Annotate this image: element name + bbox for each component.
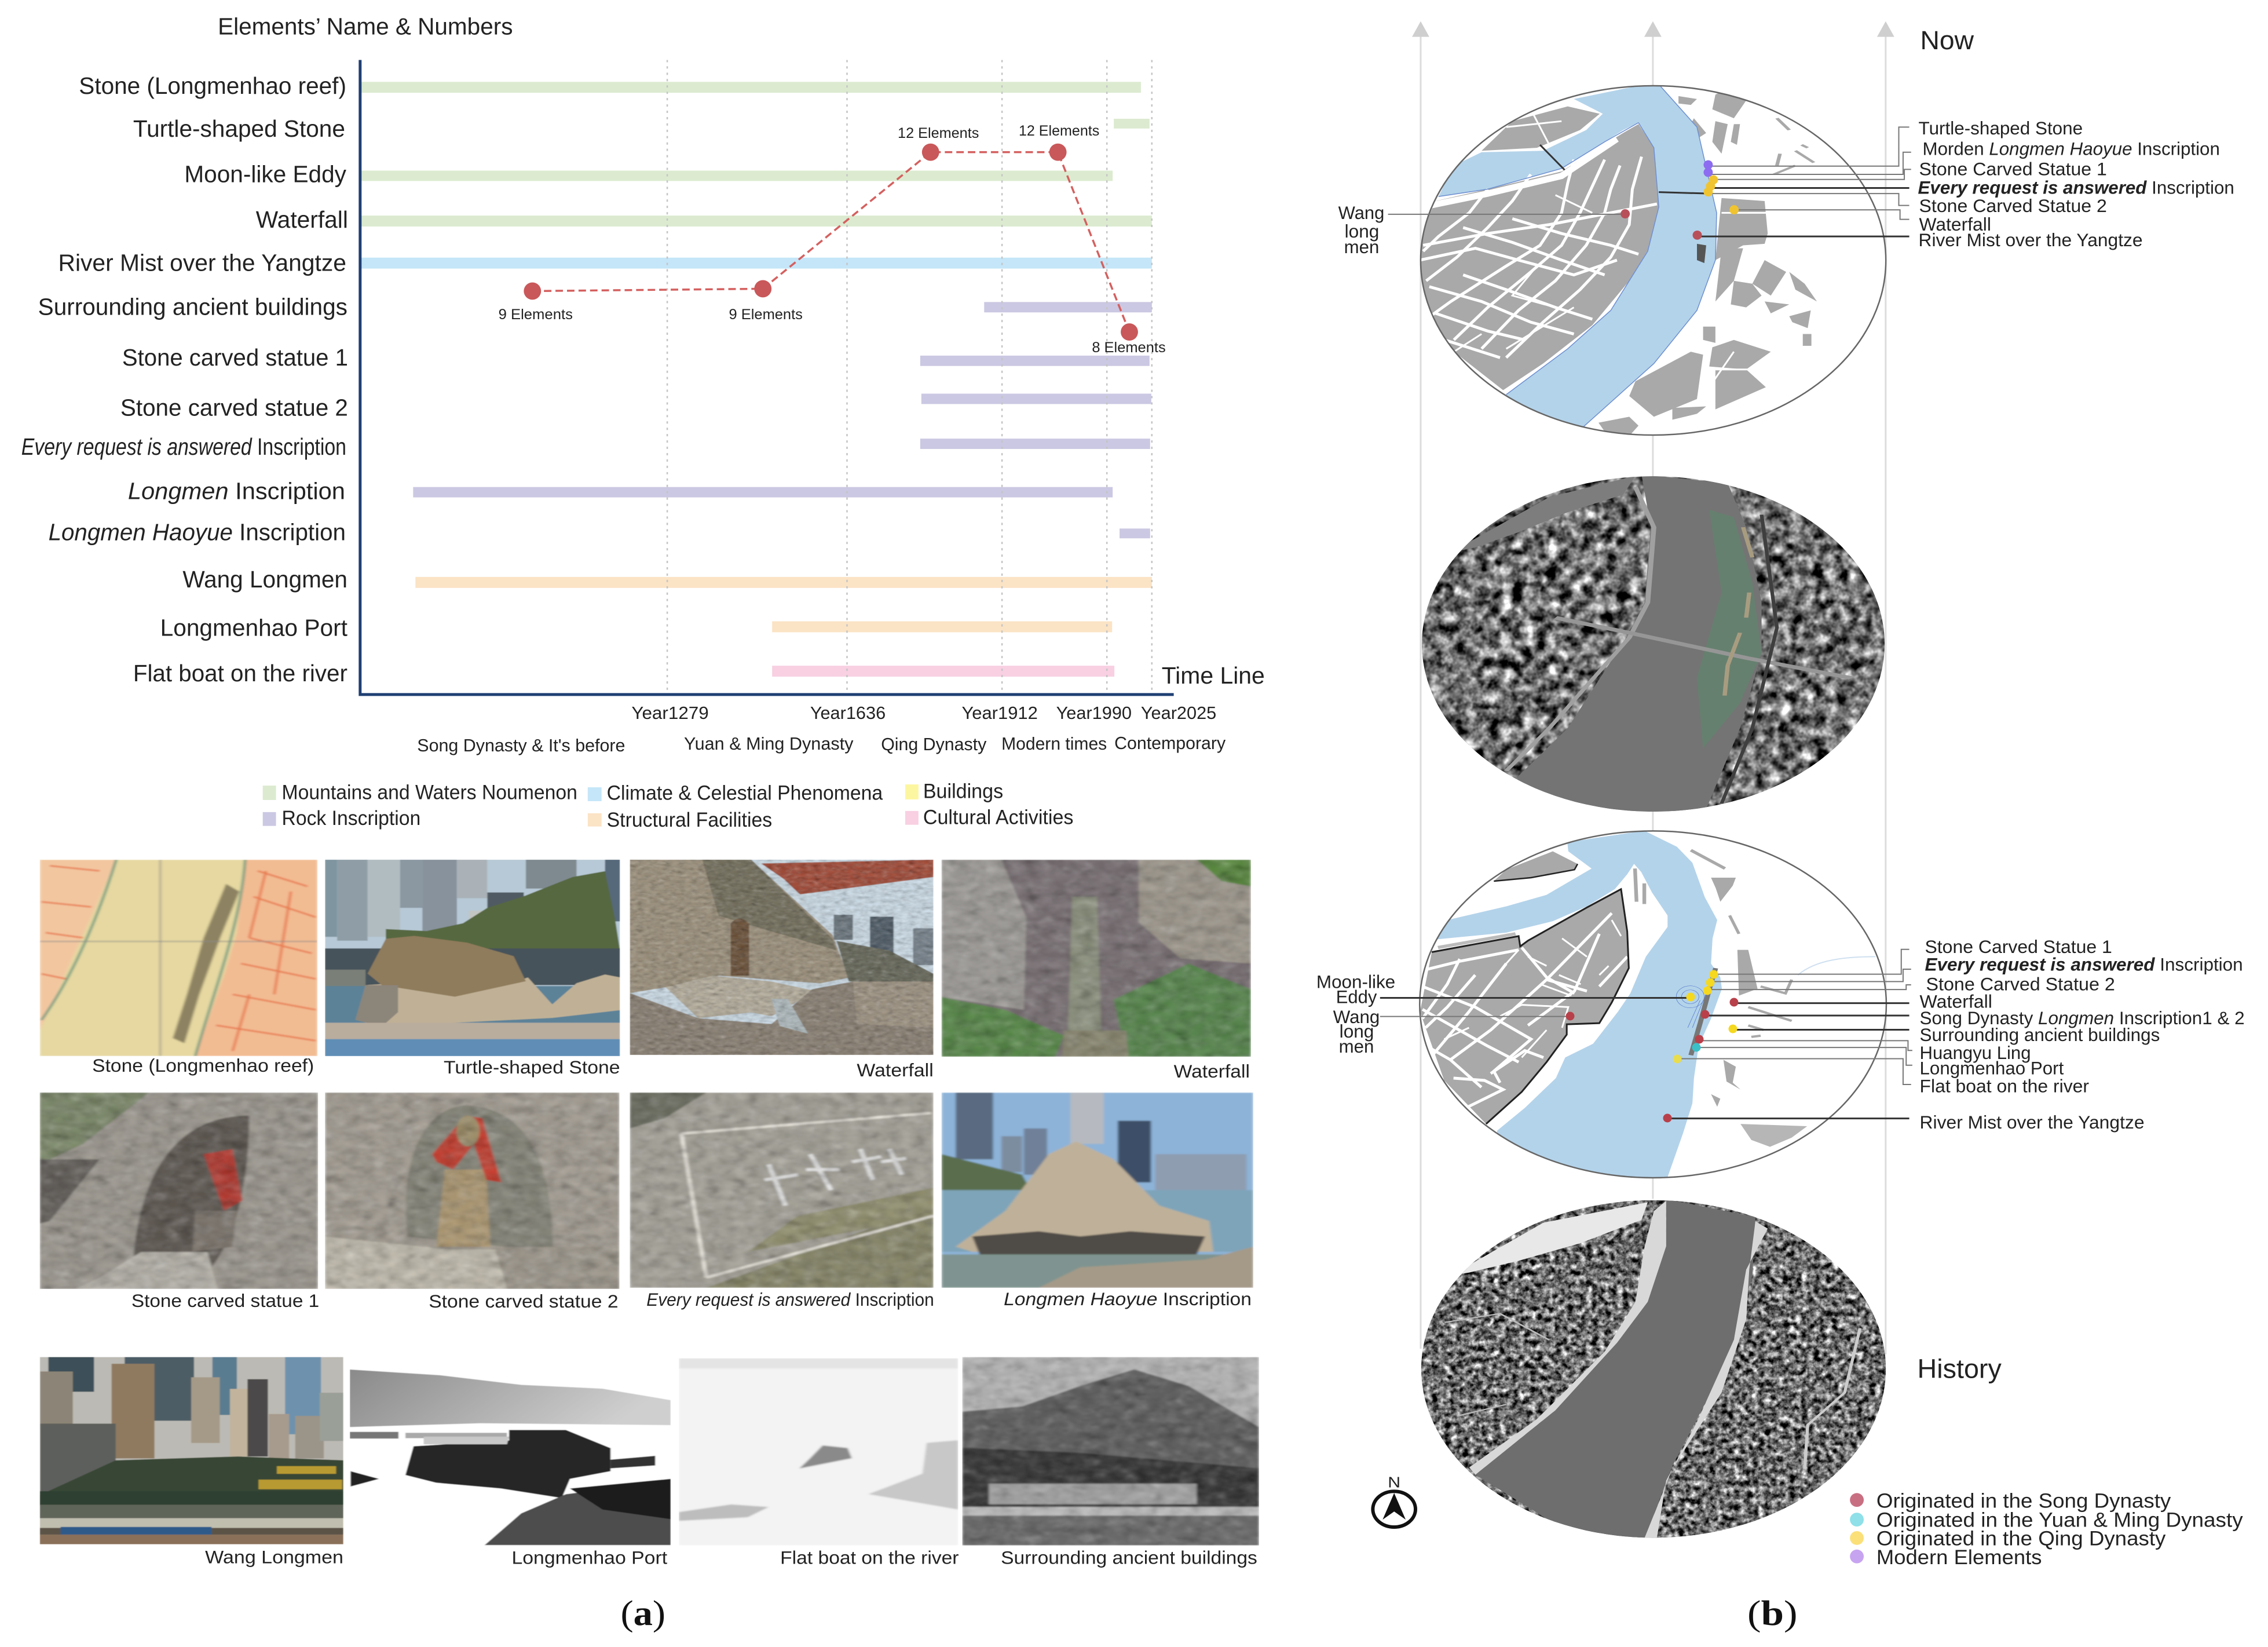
caption: Turtle-shaped Stone — [444, 1057, 620, 1078]
caption: Surrounding ancient buildings — [1001, 1547, 1257, 1568]
labels: historic map: Longmenhao Port — [1920, 1058, 2064, 1079]
element names: Every request is answered Inscription — [21, 433, 346, 460]
legend: origin dynasty: Originated in the Qing Dynasty — [1876, 1527, 2166, 1550]
labels and markers: current map: Stone Carved Statue 2 — [1919, 195, 2107, 216]
legend: origin dynasty: Modern Elements — [1876, 1546, 2042, 1569]
line: element count over time — [499, 123, 1166, 356]
caption: Longmenhao Port — [511, 1547, 667, 1568]
photo: surrounding ancient buildings historic — [962, 1357, 1259, 1546]
labels: historic map: Every request is answered Inscription — [1925, 954, 2243, 975]
element names: Longmen Inscription — [128, 478, 345, 505]
icon: north arrow — [1373, 1474, 1415, 1527]
dynasty labels: Qing Dynasty — [881, 734, 987, 754]
element names: River Mist over the Yangtze — [58, 250, 346, 276]
caption: Wang Longmen — [205, 1547, 343, 1568]
map outline — [1421, 86, 1886, 435]
labels and markers: current map: River Mist over the Yangtze — [1919, 229, 2143, 250]
photo: stone carved statue 1 — [39, 1093, 319, 1289]
caption: Stone carved statue 1 — [131, 1290, 319, 1311]
panel: present aerial image — [1422, 476, 1885, 812]
line: element count over time: 9 Elements — [729, 306, 803, 323]
category legend: Mountains and Waters Noumenon — [282, 781, 577, 804]
labels: historic map: long — [1340, 1021, 1374, 1042]
caption: Waterfall — [1174, 1061, 1250, 1082]
labels and markers: current map: Turtle-shaped Stone — [1919, 118, 2083, 138]
labels and markers: current map: men — [1344, 236, 1379, 257]
photo: carved inscription — [630, 1093, 934, 1288]
dynasty labels: Song Dynasty & It's before — [417, 735, 625, 755]
element names — [21, 72, 348, 686]
element names: Longmen Haoyue Inscription — [49, 518, 346, 545]
labels: historic map: Surrounding ancient buildings — [1920, 1024, 2160, 1045]
map markers — [1566, 970, 1739, 1123]
element names: Flat boat on the river — [133, 660, 347, 686]
photo: Longmen Haoyue inscription — [942, 1093, 1253, 1288]
labels: historic map — [1316, 936, 2245, 1133]
caption: Flat boat on the river — [780, 1547, 959, 1568]
labels: historic map: Flat boat on the river — [1920, 1076, 2089, 1097]
sub-figure label a: (a) — [621, 1594, 665, 1633]
year ticks: Year1990 — [1056, 703, 1132, 723]
line: element count over time: 9 Elements — [499, 306, 573, 323]
labels and markers: current map: Stone Carved Statue 1 — [1919, 159, 2107, 180]
map base — [1420, 86, 1886, 436]
heading: history: History — [1918, 1353, 2002, 1383]
labels: historic map: Eddy — [1336, 986, 1377, 1007]
element names: Stone carved statue 2 — [120, 394, 348, 421]
photo: old map of stone reef — [39, 860, 317, 1057]
category legend: Structural Facilities — [607, 809, 772, 831]
element duration bars — [360, 82, 1152, 677]
element names: Wang Longmen — [182, 566, 347, 593]
category legend: Rock Inscription — [282, 807, 420, 830]
caption: Longmen Haoyue Inscription — [1004, 1288, 1252, 1309]
leader lines — [1388, 127, 1911, 236]
element names: Moon-like Eddy — [184, 160, 347, 187]
category legend — [263, 780, 1073, 831]
year ticks: Year1912 — [961, 703, 1038, 723]
moon-like eddy rings — [1676, 986, 1704, 1028]
axis title: time line: Time Line — [1162, 662, 1265, 689]
icon: north arrow: N — [1388, 1474, 1400, 1491]
labels: historic map: Stone Carved Statue 1 — [1925, 936, 2112, 957]
leader lines — [1380, 950, 1912, 1119]
category legend: Cultural Activities — [923, 806, 1073, 828]
photo: flat boat historic — [679, 1358, 959, 1546]
photo: Longmenhao port historic — [350, 1357, 671, 1546]
legend: origin dynasty: Originated in the Song Dynasty — [1876, 1490, 2171, 1513]
year ticks: Year1636 — [810, 703, 886, 723]
map markers — [1620, 160, 1739, 240]
labels and markers: current map — [1338, 25, 2234, 257]
photo: Wang Longmen — [39, 1357, 343, 1544]
element names: Longmenhao Port — [160, 614, 348, 641]
year ticks: Year1279 — [631, 703, 709, 723]
photo: stone carved statue 2 — [325, 1093, 620, 1289]
panel: historic-layer map with heritage elements — [1419, 830, 1887, 1178]
element names: Turtle-shaped Stone — [133, 115, 345, 142]
labels: historic map: Waterfall — [1920, 991, 1992, 1011]
element names: Waterfall — [256, 206, 348, 233]
panel: photo gallery — [40, 860, 1259, 1633]
panel: timeline chart of elements — [21, 13, 1265, 831]
labels and markers: current map: Wang — [1338, 202, 1384, 223]
caption: Waterfall — [857, 1060, 934, 1080]
labels: historic map: Huangyu Ling — [1920, 1042, 2031, 1063]
sub-figure label b: (b) — [1747, 1594, 1798, 1633]
labels: historic map: Moon-like — [1316, 971, 1395, 992]
dynasty labels: Modern times — [1001, 733, 1107, 754]
caption: Every request is answered Inscription — [646, 1289, 934, 1310]
line: element count over time: 12 Elements — [898, 125, 979, 141]
photo: waterfall in garden — [942, 860, 1251, 1057]
line: element count over time: 8 Elements — [1092, 339, 1166, 356]
labels and markers: current map: long — [1345, 221, 1379, 242]
labels: historic map: men — [1339, 1036, 1374, 1057]
element names: Stone carved statue 1 — [122, 344, 348, 371]
element names: Surrounding ancient buildings — [38, 293, 347, 320]
year ticks: Year2025 — [1141, 703, 1216, 723]
photo: turtle-shaped stone — [325, 860, 620, 1057]
chart title: Elements’ Name & Numbers — [218, 13, 513, 40]
category legend: Climate & Celestial Phenomena — [607, 781, 883, 804]
line: element count over time: 12 Elements — [1019, 123, 1099, 139]
dynasty labels: Contemporary — [1114, 733, 1226, 753]
labels and markers: current map: Every request is answered Inscription — [1918, 177, 2234, 198]
dynasty labels: Yuan & Ming Dynasty — [684, 733, 854, 754]
labels and markers: current map: Morden Longmen Haoyue Inscription — [1923, 138, 2220, 159]
lower right labels group — [1373, 1353, 2243, 1633]
map base — [1420, 831, 1886, 1179]
axes — [360, 60, 1174, 695]
caption: Stone (Longmenhao reef) — [92, 1055, 314, 1076]
panel: historic aerial image — [1421, 1200, 1886, 1538]
photo: waterfall by embankment — [630, 860, 934, 1056]
heading: now: Now — [1921, 25, 1974, 55]
legend: origin dynasty — [1850, 1490, 2243, 1569]
element names: Stone (Longmenhao reef) — [79, 72, 346, 99]
labels: historic map: Song Dynasty Longmen Inscription1 & 2 — [1920, 1007, 2245, 1028]
panel: current map with heritage elements — [1388, 85, 1911, 436]
map outline — [1420, 831, 1886, 1178]
labels: historic map: River Mist over the Yangtze — [1920, 1112, 2145, 1133]
labels: historic map: Wang — [1333, 1006, 1380, 1027]
caption: Stone carved statue 2 — [429, 1291, 619, 1312]
dynasty labels — [417, 733, 1226, 755]
year ticks — [631, 703, 1216, 723]
category legend: Buildings — [923, 780, 1003, 802]
time axis guide lines with arrows — [1412, 21, 1894, 1354]
labels and markers: current map: Waterfall — [1919, 214, 1991, 235]
labels: historic map: Stone Carved Statue 2 — [1926, 973, 2115, 994]
legend: origin dynasty: Originated in the Yuan & Ming Dynasty — [1876, 1509, 2243, 1532]
